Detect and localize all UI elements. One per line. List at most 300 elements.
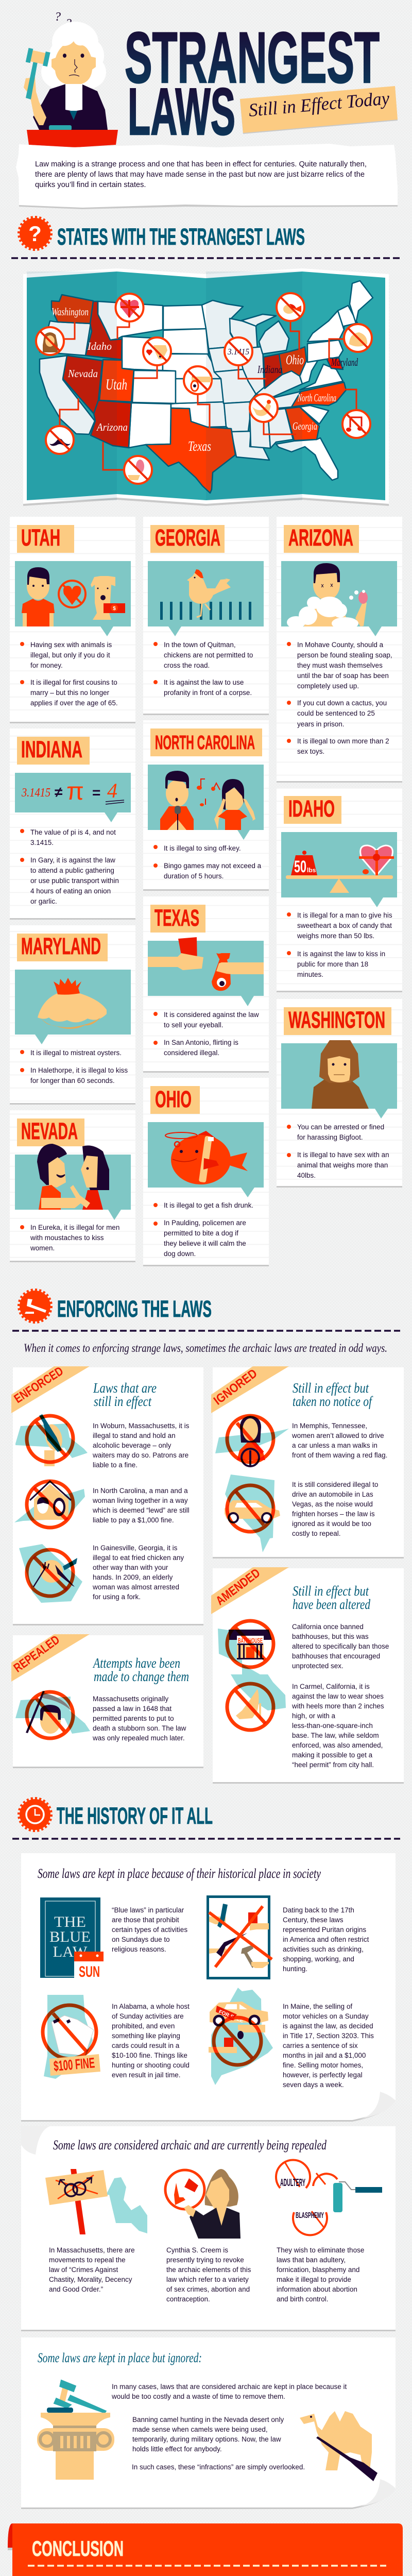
map labels: Indiana	[257, 363, 282, 376]
heading: still in effect but taken no notice of: taken no notice of	[293, 1394, 373, 1409]
text: alabama: cards could result in a	[112, 2042, 180, 2049]
intro panel	[16, 144, 398, 209]
illustration: scale with weight and candy heart: lbs	[307, 867, 316, 874]
text: bathhouses: bathhouses that encouraged	[292, 1652, 380, 1660]
map icon: eyeball sale	[184, 366, 212, 394]
panel: amended	[211, 1566, 404, 1784]
text: blue laws: on Sundays due to	[112, 1936, 170, 1943]
bullets	[153, 641, 253, 697]
icon: maine car for sale: FOR SALE	[218, 2009, 244, 2024]
illustration: value of pi equation	[15, 773, 131, 822]
bullets: for longer than 60 seconds.	[30, 1077, 115, 1084]
panel: indiana	[10, 728, 135, 920]
panel: laws kept but ignored	[21, 2337, 396, 2509]
panel: maryland: MARYLAND	[21, 933, 101, 959]
map icon: moustache	[46, 426, 74, 454]
bullets: with moustaches to kiss	[30, 1234, 104, 1242]
ribbon: enforced: ENFORCED	[12, 1364, 66, 1406]
panel: conclusion: CONCLUSION	[32, 2536, 124, 2561]
text: massachusetts repeal: permitted parents to put to	[93, 1715, 174, 1722]
heading: attempts have been made to change them: made to change them	[94, 1669, 189, 1684]
icon: paint roller erasing laws: BLASPHEMY	[296, 2211, 324, 2220]
bullets: cross the road.	[164, 662, 210, 669]
bullets: It is illegal to own more than 2	[297, 737, 389, 745]
panel: archaic laws being repealed	[21, 2126, 396, 2331]
text: north carolina law: In North Carolina, a man and a	[93, 1487, 188, 1495]
bullets: considered illegal.	[164, 1049, 219, 1057]
panel: nevada: NEVADA	[21, 1118, 78, 1144]
illustration: man with moustache and woman	[15, 1144, 131, 1220]
icon: camel and rifle	[300, 2411, 377, 2481]
text: repeal movement columns: They wish to eliminate those	[277, 2246, 364, 2254]
text: maine: months in jail and a $1,000	[283, 2052, 366, 2059]
bullets: or use public transport within	[30, 877, 119, 885]
bullets: You can be arrested or fined	[297, 1123, 384, 1131]
map icon: drunk fish	[277, 293, 304, 321]
text: alabama: In Alabama, a whole host	[112, 2003, 190, 2010]
text: puritan origins: shopping, working, and	[283, 1955, 354, 1963]
illustration: scale with weight and candy heart	[281, 832, 397, 907]
map icon: pi number: 3.1415	[227, 347, 249, 357]
text: massachusetts repeal: Massachusetts originally	[93, 1695, 168, 1703]
bullets: 40lbs.	[297, 1172, 316, 1179]
text: repeal movement columns: contraception.	[166, 2295, 210, 2303]
bullets: In the town of Quitman,	[164, 641, 236, 649]
subtitle badge: still in effect today: Still in Effect Today	[248, 88, 390, 121]
illustration: chicken at crosswalk	[148, 561, 264, 636]
panel: georgia: GEORGIA	[155, 524, 220, 551]
map labels: Texas	[188, 438, 211, 454]
intro panel: quirks you’ll find in certain states.	[35, 181, 146, 189]
icon: no drinking in massachusetts	[15, 1414, 88, 1466]
bullets: they must wash themselves	[297, 662, 383, 669]
bullets: could be sentenced to 25	[297, 709, 375, 717]
title: strangest laws	[125, 17, 380, 149]
text: repeal movement columns: law of “Crimes Against	[49, 2266, 118, 2274]
text: repeal movement columns: make it illegal to provide	[277, 2276, 351, 2283]
panel: maryland	[10, 925, 135, 1105]
bullets: It is illegal for first cousins to	[30, 679, 117, 686]
text: bathhouses: bathhouses, but this was	[292, 1633, 369, 1640]
panel: north carolina	[143, 720, 269, 891]
map labels: Washington	[52, 306, 89, 318]
text: maine: seven days a week.	[283, 2081, 344, 2089]
ribbon: repealed: REPEALED	[11, 1633, 62, 1675]
text: memphis: front of them waving a red flag.	[292, 1451, 387, 1459]
text: camel hunting: made sense when camels were being used,	[132, 2426, 268, 2433]
intro panel: there are plenty of laws that may have made sense in the past but now are just bizarre relics of the	[35, 171, 365, 179]
text: maine: is against the law, as decided	[283, 2022, 373, 2030]
text: carmel: against the law to wear shoes	[292, 1692, 384, 1700]
text: alabama: even result in jail time.	[112, 2071, 181, 2079]
map icon: music notes	[342, 410, 370, 438]
text: memphis: a car unless a man walks in	[292, 1442, 377, 1449]
panel: ignored	[211, 1366, 404, 1558]
text: woburn: alcoholic beverage – only	[93, 1442, 171, 1449]
text: camel hunting: temporarily, during military options. Now, the law	[132, 2435, 281, 2443]
panel: idaho: IDAHO	[288, 795, 335, 822]
map labels: North Carolina	[297, 392, 336, 404]
text: puritan origins: hunting.	[283, 1965, 307, 1973]
bullets: years in prison.	[297, 720, 345, 728]
bullets: sweetheart a box of candy that	[297, 922, 392, 929]
text: las vegas: ignored as it would be too	[292, 1520, 371, 1528]
bullets: It is illegal to sing off-key.	[164, 844, 241, 852]
text: alabama: prohibited, and even	[112, 2022, 175, 2030]
map icon: oyster	[344, 324, 372, 352]
icon: no lewd cohabitation in north carolina	[14, 1481, 85, 1528]
illustration: value of pi equation: 3.1415	[21, 786, 50, 800]
map labels	[52, 306, 358, 454]
illustration: oyster with crown	[15, 970, 131, 1044]
bullets: for money.	[30, 662, 63, 669]
heading: still in effect but have been altered	[293, 1583, 370, 1612]
panel: texas: TEXAS	[154, 905, 199, 931]
text: maine: motor vehicles on a Sunday	[283, 2012, 369, 2020]
illustration: scale with weight and candy heart: 50	[294, 857, 306, 876]
text: alabama: $10-100 fine. Things like	[112, 2052, 187, 2059]
map icon: bigfoot	[36, 327, 64, 355]
bullets: In Mohave County, should a	[297, 641, 384, 649]
illustration: man washing with soap	[281, 561, 397, 636]
bullets	[153, 1201, 253, 1258]
bullets: In Paulding, policemen are	[164, 1219, 246, 1227]
heading: historical place: Some laws are kept in place because of their historical place in society	[38, 1866, 321, 1881]
bullets: Having sex with animals is	[30, 641, 112, 649]
intro panel: Law making is a strange process and one that has been in effect for centuries. Quite naturally then,	[35, 160, 367, 168]
bullets	[20, 1224, 119, 1252]
illustration: value of pi equation: 4	[107, 779, 117, 802]
ribbon: repealed	[11, 1633, 90, 1682]
bullets: In Eureka, it is illegal for men	[30, 1224, 119, 1231]
text: carmel: high, or with a	[292, 1712, 336, 1720]
text: repeal movement columns: laws that ban adultery,	[277, 2256, 346, 2264]
icon: judge with gavel: ?	[65, 17, 72, 30]
heading: archaic: Some laws are considered archaic and are currently being repealed	[53, 2138, 327, 2153]
heading: laws still in effect: still in effect	[94, 1394, 152, 1409]
panel: ohio	[143, 1078, 269, 1266]
text: carmel: less-than-one-square-inch	[292, 1722, 373, 1730]
icon: bathhouse in california	[218, 1621, 273, 1700]
text: repeal movement columns	[49, 2246, 364, 2303]
map: united states with strangest-law states	[23, 268, 389, 506]
heading: laws still in effect: Laws that are	[93, 1380, 157, 1396]
illustration: man, no-love sign and dog: $	[113, 606, 116, 612]
ribbon: ignored: IGNORED	[211, 1366, 260, 1408]
map icon: candy heart	[115, 294, 143, 321]
text: alabama: hunting or shooting could	[112, 2061, 190, 2069]
panel: conclusion	[8, 2523, 408, 2576]
bullets: until the bar of soap has been	[297, 672, 389, 680]
text: blue laws: are those that prohibit	[112, 1916, 179, 1924]
bullets: marry – but this no longer	[30, 689, 110, 697]
section heading: enforcing the laws: ENFORCING THE LAWS	[57, 1296, 212, 1322]
icon: gavel on column	[37, 2381, 114, 2480]
text: woburn: liable to a fine.	[93, 1461, 138, 1469]
map icon: dog	[143, 337, 171, 365]
icon: paint roller erasing laws: ADULTERY	[280, 2177, 305, 2189]
panel: ohio: OHIO	[155, 1086, 192, 1112]
section heading: enforcing the laws	[12, 1290, 400, 1331]
bullets: or garlic.	[30, 897, 57, 905]
map labels: Nevada	[67, 367, 98, 380]
map connectors	[60, 321, 356, 470]
heading: still in effect but taken no notice of: Still in effect but	[293, 1380, 369, 1396]
map labels: Ohio	[286, 352, 304, 367]
bullets: Bingo games may not exceed a	[164, 862, 262, 870]
map labels: Maryland	[331, 356, 358, 368]
panel: arizona	[277, 517, 402, 783]
illustration: bigfoot	[281, 1040, 397, 1118]
panel: nevada	[10, 1110, 135, 1262]
section heading: the history of it all	[12, 1799, 400, 1839]
bullets: 4 hours of eating an onion	[30, 887, 111, 895]
text: repeal movement columns: and birth control.	[277, 2295, 329, 2303]
heading: still in effect but taken no notice of	[293, 1380, 373, 1409]
bullets: illegal, but only if you do it	[30, 651, 110, 659]
icon: no fork and knife in georgia	[19, 1544, 82, 1603]
text: repeal movement columns: law which refer to a variety	[166, 2276, 249, 2283]
text: repeal movement columns: of sex crimes, abortion and	[166, 2285, 250, 2293]
text: gainesville: other way than with your	[93, 1564, 168, 1571]
text: costly to remove: would be too costly and a waste of time to remove them.	[111, 2393, 285, 2400]
text: woburn: In Woburn, Massachusetts, it is	[93, 1422, 190, 1430]
text: costly to remove: In many cases, laws that are considered archaic are kept in place because it	[112, 2383, 347, 2391]
illustration: value of pi equation: =	[92, 785, 100, 801]
text: blue laws: certain types of activities	[112, 1926, 187, 1934]
text: repeal movement columns: the archaic elements of this	[166, 2266, 251, 2274]
text: gainesville: for using a fork.	[93, 1593, 141, 1601]
text: camel hunting: holds little effect for anybody.	[132, 2445, 222, 2453]
bullets: It is against the law to use	[164, 679, 244, 686]
text: repeal movement columns: and Good Order.”	[49, 2285, 103, 2293]
bullets	[287, 641, 392, 755]
text: maine: In Maine, the selling of	[283, 2003, 352, 2010]
text: puritan origins: activities such as drinking,	[283, 1945, 364, 1953]
icon: bathhouse in california: BATHHOUSE	[238, 1636, 263, 1645]
illustration: off-key singer and woman covering ears	[148, 765, 264, 840]
icon: cynthia creem	[165, 2169, 241, 2239]
text: gainesville: illegal to eat fried chicken any	[93, 1554, 184, 1562]
bullets: It is considered against the law	[164, 1011, 259, 1019]
bullets: duration of 5 hours.	[164, 872, 224, 880]
bullets: animal that weighs more than	[297, 1161, 388, 1169]
icon: blue law book and calendar: THE	[54, 1913, 86, 1930]
bullets: women.	[30, 1244, 55, 1252]
bullets: It is illegal to have sex with an	[297, 1151, 389, 1159]
panel: texas	[143, 896, 269, 1073]
bullets: minutes.	[297, 971, 323, 978]
bullets: In Halethorpe, it is illegal to kiss	[30, 1066, 128, 1074]
icon: banned sunday activities	[208, 1897, 272, 1978]
text: alabama: something like playing	[112, 2032, 180, 2040]
bullets: If you cut down a cactus, you	[297, 699, 387, 707]
panel: enforced	[11, 1364, 203, 1625]
text: alabama: of Sunday activities are	[112, 2012, 184, 2020]
map labels: Georgia	[293, 420, 317, 432]
text: repeal movement columns: presently trying to revoke	[166, 2256, 244, 2264]
subtitle badge: still in effect today	[240, 86, 398, 134]
text: bathhouses: unprotected sex.	[292, 1662, 344, 1670]
text: carmel: base. The law, while seldom	[292, 1732, 379, 1739]
ribbon: amended: AMENDED	[213, 1566, 263, 1608]
ribbon: amended	[211, 1566, 289, 1614]
icon: high heel in california	[227, 1674, 286, 1730]
bullets: It is illegal to mistreat oysters.	[30, 1049, 122, 1057]
icon: reaper in massachusetts	[15, 1691, 90, 1738]
text: repeal movement columns: Chastity, Morality, Decency	[49, 2276, 132, 2283]
text: repeal movement columns: In Massachusetts, there are	[49, 2246, 135, 2254]
panel: repealed	[11, 1633, 203, 1768]
map labels: Idaho	[87, 340, 112, 352]
heading: attempts have been made to change them: Attempts have been	[92, 1655, 180, 1671]
text: massachusetts repeal: was only repealed much later.	[92, 1734, 185, 1742]
section heading: states with the strangest laws: ?	[28, 222, 42, 246]
icon: blue law book and calendar: LAW	[53, 1943, 88, 1960]
panel: idaho	[277, 788, 402, 992]
text: las vegas: costly to repeal.	[292, 1530, 341, 1537]
icon: woman driving in tennessee	[215, 1416, 289, 1466]
text: woburn: waiters may do so. Patrons are	[92, 1451, 188, 1459]
text: bathhouses: California once banned	[292, 1623, 364, 1631]
panel: georgia	[143, 517, 269, 715]
text: carmel: with heels more than 2 inches	[291, 1702, 384, 1710]
text: blue laws: “Blue laws” in particular	[112, 1906, 184, 1914]
text: memphis: In Memphis, Tennessee,	[292, 1422, 367, 1430]
bullets	[153, 1011, 259, 1057]
icon: blue law book and calendar	[40, 1897, 104, 1980]
bullets: applies if over the age of 65.	[30, 699, 118, 707]
text: camel hunting: Banning camel hunting in the Nevada desert only	[132, 2416, 284, 2424]
section heading: the history of it all: THE HISTORY OF IT ALL	[57, 1803, 213, 1829]
heading: attempts have been made to change them	[92, 1655, 189, 1684]
text: las vegas: Vegas, as the noise would	[292, 1500, 373, 1508]
text: las vegas: drive an automobile in Las	[292, 1490, 373, 1498]
icon: blue law book and calendar: BLUE	[49, 1928, 91, 1945]
text: memphis: women aren’t allowed to drive	[291, 1432, 384, 1439]
bullets: weighs more than 50 lbs.	[297, 932, 374, 940]
bullets: for harassing Bigfoot.	[297, 1133, 363, 1141]
icon: paint roller erasing laws	[276, 2160, 382, 2235]
title: strangest laws: LAWS	[128, 75, 235, 149]
text: carmel: In Carmel, California, it is	[292, 1683, 370, 1690]
bullets	[287, 911, 392, 978]
text: gainesville: hands. In 2009, an elderly	[93, 1573, 173, 1581]
text: puritan origins: Dating back to the 17th	[283, 1906, 354, 1914]
text: north carolina law: which is deemed “lewd” are still	[92, 1506, 190, 1514]
heading: ignored: Some laws are kept in place but ignored:	[38, 2350, 202, 2365]
map icon: pi number	[225, 337, 252, 365]
text: las vegas: It is still considered illegal to	[292, 1481, 378, 1488]
icon: judge with gavel: ?	[57, 26, 63, 39]
panel: indiana: INDIANA	[21, 736, 82, 762]
text: carmel: making it possible to get a	[292, 1751, 373, 1759]
icon: alabama cards and fine	[43, 1995, 100, 2079]
bullets: In San Antonio, flirting is	[164, 1039, 238, 1046]
text: massachusetts repeal: death a stubborn son. The law	[93, 1724, 186, 1732]
text: blue laws: religious reasons.	[112, 1945, 166, 1953]
text: north carolina law: woman living together in a way	[92, 1497, 188, 1504]
text: maine: however, is perfectly legal	[283, 2071, 363, 2079]
icon: alabama cards and fine: $100 FINE	[53, 2055, 95, 2074]
bullets: to attend a public gathering	[30, 867, 114, 874]
section heading: states with the strangest laws	[11, 217, 400, 258]
bullets: 3.1415.	[30, 839, 54, 846]
illustration: man, no-love sign and dog	[15, 561, 131, 636]
illustration: selling an eyeball	[148, 937, 264, 1006]
text: repeal movement columns: movements to repeal the	[49, 2256, 126, 2264]
bullets	[20, 641, 118, 707]
panel: arizona: ARIZONA	[288, 524, 353, 551]
bullets: completely used up.	[297, 682, 359, 690]
text: maine: fine. Selling motor homes,	[283, 2061, 363, 2069]
heading: laws still in effect	[93, 1380, 157, 1409]
text: camel hunting: In such cases, these “infractions” are simply overlooked.	[132, 2463, 305, 2471]
map icon: chicken	[250, 394, 278, 422]
text: las vegas: frighten horses – the law is	[292, 1510, 375, 1518]
icon: judge with gavel: ?	[55, 10, 61, 24]
heading: still in effect but have been altered: have been altered	[293, 1597, 370, 1612]
text: carmel: “heel permit” from city hall.	[292, 1761, 374, 1769]
bullets: In Gary, it is against the law	[30, 856, 115, 864]
text: woburn: illegal to stand and hold an	[93, 1432, 176, 1439]
panel: utah	[10, 517, 135, 723]
panel: historical laws	[21, 1853, 396, 2122]
text: puritan origins: Century, these laws	[283, 1916, 344, 1924]
icon: blue law book and calendar: SUN	[79, 1963, 100, 1980]
map icon: soap	[124, 456, 152, 484]
bullets: It is illegal for a man to give his	[297, 911, 392, 919]
bullets: sex toys.	[297, 748, 324, 755]
text: north carolina law: liable to pay a $1,000 fine.	[93, 1516, 174, 1524]
icon: car in nevada	[225, 1475, 280, 1552]
bullets: to sell your eyeball.	[164, 1021, 224, 1029]
text: repeal movement columns: information about abortion	[277, 2285, 357, 2293]
ribbon: enforced	[11, 1364, 90, 1413]
ribbon: ignored	[211, 1366, 289, 1413]
bullets: chickens are not permitted to	[164, 651, 253, 659]
icon: sign in massachusetts	[45, 2169, 147, 2234]
panel: utah: UTAH	[21, 524, 60, 551]
map labels: Utah	[106, 376, 127, 393]
text: maine: carries a sentence of six	[283, 2042, 358, 2049]
text: carmel: enforced, was also amended,	[292, 1741, 383, 1749]
bullets	[20, 828, 119, 905]
bullets	[153, 844, 262, 880]
bullets: profanity in front of a corpse.	[164, 689, 252, 697]
text: repeal movement columns: fornication, blasphemy and	[277, 2266, 359, 2274]
illustration: value of pi equation: ≠	[55, 784, 62, 800]
text: repeal movement columns: Cynthia S. Creem is	[166, 2246, 228, 2254]
bullets: public for more than 18	[297, 960, 368, 968]
text: puritan origins: represented Puritan origins	[283, 1926, 366, 1934]
bullets: dog down.	[164, 1250, 196, 1258]
bullets	[20, 1049, 128, 1084]
heading: still in effect but have been altered: Still in effect but	[293, 1583, 369, 1599]
text: massachusetts repeal: passed a law in 1648 that	[93, 1705, 171, 1713]
text: bathhouses: altered to specifically ban those	[292, 1642, 389, 1650]
bullets: person be found stealing soap,	[297, 651, 392, 659]
text: puritan origins: in America and often restrict	[283, 1936, 369, 1943]
panel: north carolina: NORTH CAROLINA	[155, 732, 255, 754]
icon: maine car for sale	[209, 1988, 273, 2085]
text: gainesville: In Gainesville, Georgia, it is	[93, 1544, 178, 1552]
bullets	[287, 1123, 389, 1179]
bullets: permitted to bite a dog if	[164, 1229, 238, 1237]
bullets: they believe it will calm the	[164, 1240, 246, 1247]
illustration: drunk fish	[148, 1122, 264, 1197]
bullets: It is against the law to kiss in	[297, 950, 385, 958]
